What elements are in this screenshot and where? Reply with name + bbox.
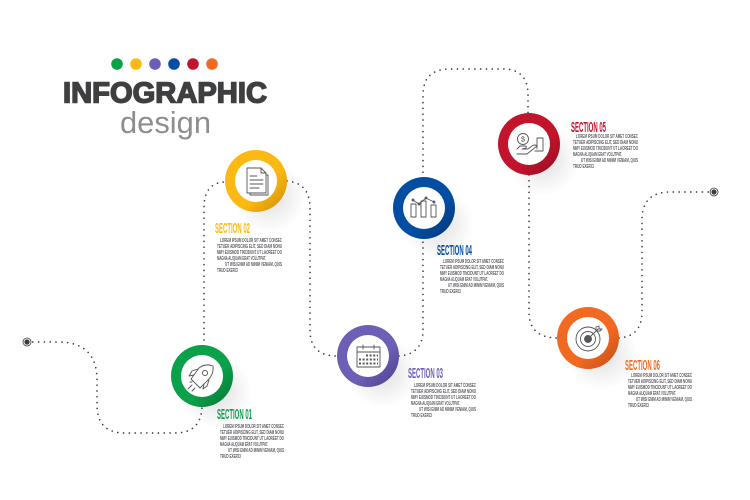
title: INFOGRAPHIC	[63, 78, 267, 110]
section 01 node	[171, 345, 252, 428]
text: SECTION 06	[625, 358, 660, 374]
section 05 text	[573, 134, 638, 170]
section 03 text: LOREM IPSUM DOLOR SIT AMET CONSEC	[414, 383, 476, 389]
section 06 text: TETUER ADIPISCING ELIT, SED DIAM NONU	[628, 379, 692, 385]
section 03 text: UT WISI ENIM AD MINIM VENIAM, QUIS	[419, 407, 476, 413]
section 02 text	[217, 238, 282, 274]
section 04 text: UT WISI ENIM AD MINIM VENIAM, QUIS	[448, 283, 504, 289]
section 02 text: TETUER ADIPISCING ELIT, SED DIAM NONU	[217, 244, 282, 250]
section 01 text: LOREM IPSUM DOLOR SIT AMET CONSEC	[223, 424, 284, 430]
section 02 node	[225, 150, 306, 233]
section 06 text	[628, 373, 692, 409]
icon: rocket	[188, 365, 213, 391]
icon: calendar	[357, 345, 380, 367]
section 06 node	[557, 307, 638, 390]
section 06 text: TRUD EXERCI	[628, 403, 649, 409]
section 05 text: TRUD EXERCI	[573, 164, 594, 170]
section 01 text: TRUD EXERCI	[220, 454, 241, 460]
section 04 text: MMY EUISMOD TINCIDUNT UT LAOREET DO	[440, 271, 504, 277]
section 03 text	[411, 383, 476, 419]
section 03 text: MMY EUISMOD TINCIDUNT UT LAOREET DO	[411, 395, 476, 401]
section 02 text: MMY EUISMOD TINCIDUNT UT LAOREET DO	[217, 250, 282, 256]
section 05 text: TETUER ADIPISCING ELIT, SED DIAM NONU	[573, 140, 638, 146]
section 06 text: MMY EUISMOD TINCIDUNT UT LAOREET DO	[628, 385, 692, 391]
text: SECTION 02	[215, 221, 250, 237]
section 05 text: MMY EUISMOD TINCIDUNT UT LAOREET DO	[573, 146, 638, 152]
section 01 text: MMY EUISMOD TINCIDUNT UT LAOREET DO	[220, 436, 284, 442]
section 05 text: MAGNA ALIQUAM ERAT VOLUTPAT.	[573, 152, 622, 158]
end marker	[710, 188, 718, 196]
icon: document	[247, 168, 268, 195]
section 01 text: UT WISI ENIM AD MINIM VENIAM, QUIS	[228, 448, 284, 454]
icon: bar chart	[411, 197, 436, 217]
section 03 text: MAGNA ALIQUAM ERAT VOLUTPAT.	[411, 401, 460, 407]
section 06 text: LOREM IPSUM DOLOR SIT AMET CONSEC	[631, 373, 692, 379]
start marker	[23, 338, 31, 346]
section 01 text: TETUER ADIPISCING ELIT, SED DIAM NONU	[220, 430, 284, 436]
section 04 text	[440, 259, 504, 295]
subtitle: design	[120, 105, 211, 140]
section 02 text: LOREM IPSUM DOLOR SIT AMET CONSEC	[220, 238, 282, 244]
section 02 text: TRUD EXERCI	[217, 268, 238, 274]
section 06 text: UT WISI ENIM AD MINIM VENIAM, QUIS	[636, 397, 692, 403]
text: SECTION 05	[571, 120, 606, 136]
icon: target	[576, 326, 602, 351]
icon: hand with coin: $	[521, 136, 525, 144]
section 03 text: TRUD EXERCI	[411, 413, 432, 419]
text: SECTION 03	[408, 366, 443, 382]
section 04 text: MAGNA ALIQUAM ERAT VOLUTPAT.	[440, 277, 488, 283]
section 04 text: LOREM IPSUM DOLOR SIT AMET CONSEC	[443, 259, 504, 265]
section 01 text: MAGNA ALIQUAM ERAT VOLUTPAT.	[220, 442, 268, 448]
section 03 node	[337, 325, 418, 408]
section 01 text	[220, 424, 284, 460]
section 03 text: TETUER ADIPISCING ELIT, SED DIAM NONU	[411, 389, 476, 395]
section 04 text: TRUD EXERCI	[440, 289, 461, 295]
section 04 node	[393, 177, 474, 260]
section 05 node	[498, 113, 579, 196]
section 04 text: TETUER ADIPISCING ELIT, SED DIAM NONU	[440, 265, 504, 271]
text: SECTION 04	[437, 243, 472, 259]
section 02 text: MAGNA ALIQUAM ERAT VOLUTPAT.	[217, 256, 266, 262]
dotted path	[27, 69, 712, 433]
section 05 text: LOREM IPSUM DOLOR SIT AMET CONSEC	[576, 134, 638, 140]
section 02 text: UT WISI ENIM AD MINIM VENIAM, QUIS	[225, 262, 282, 268]
text: SECTION 01	[217, 407, 252, 423]
section 06 text: MAGNA ALIQUAM ERAT VOLUTPAT.	[628, 391, 676, 397]
colour dots	[111, 58, 218, 70]
section 05 text: UT WISI ENIM AD MINIM VENIAM, QUIS	[581, 158, 638, 164]
